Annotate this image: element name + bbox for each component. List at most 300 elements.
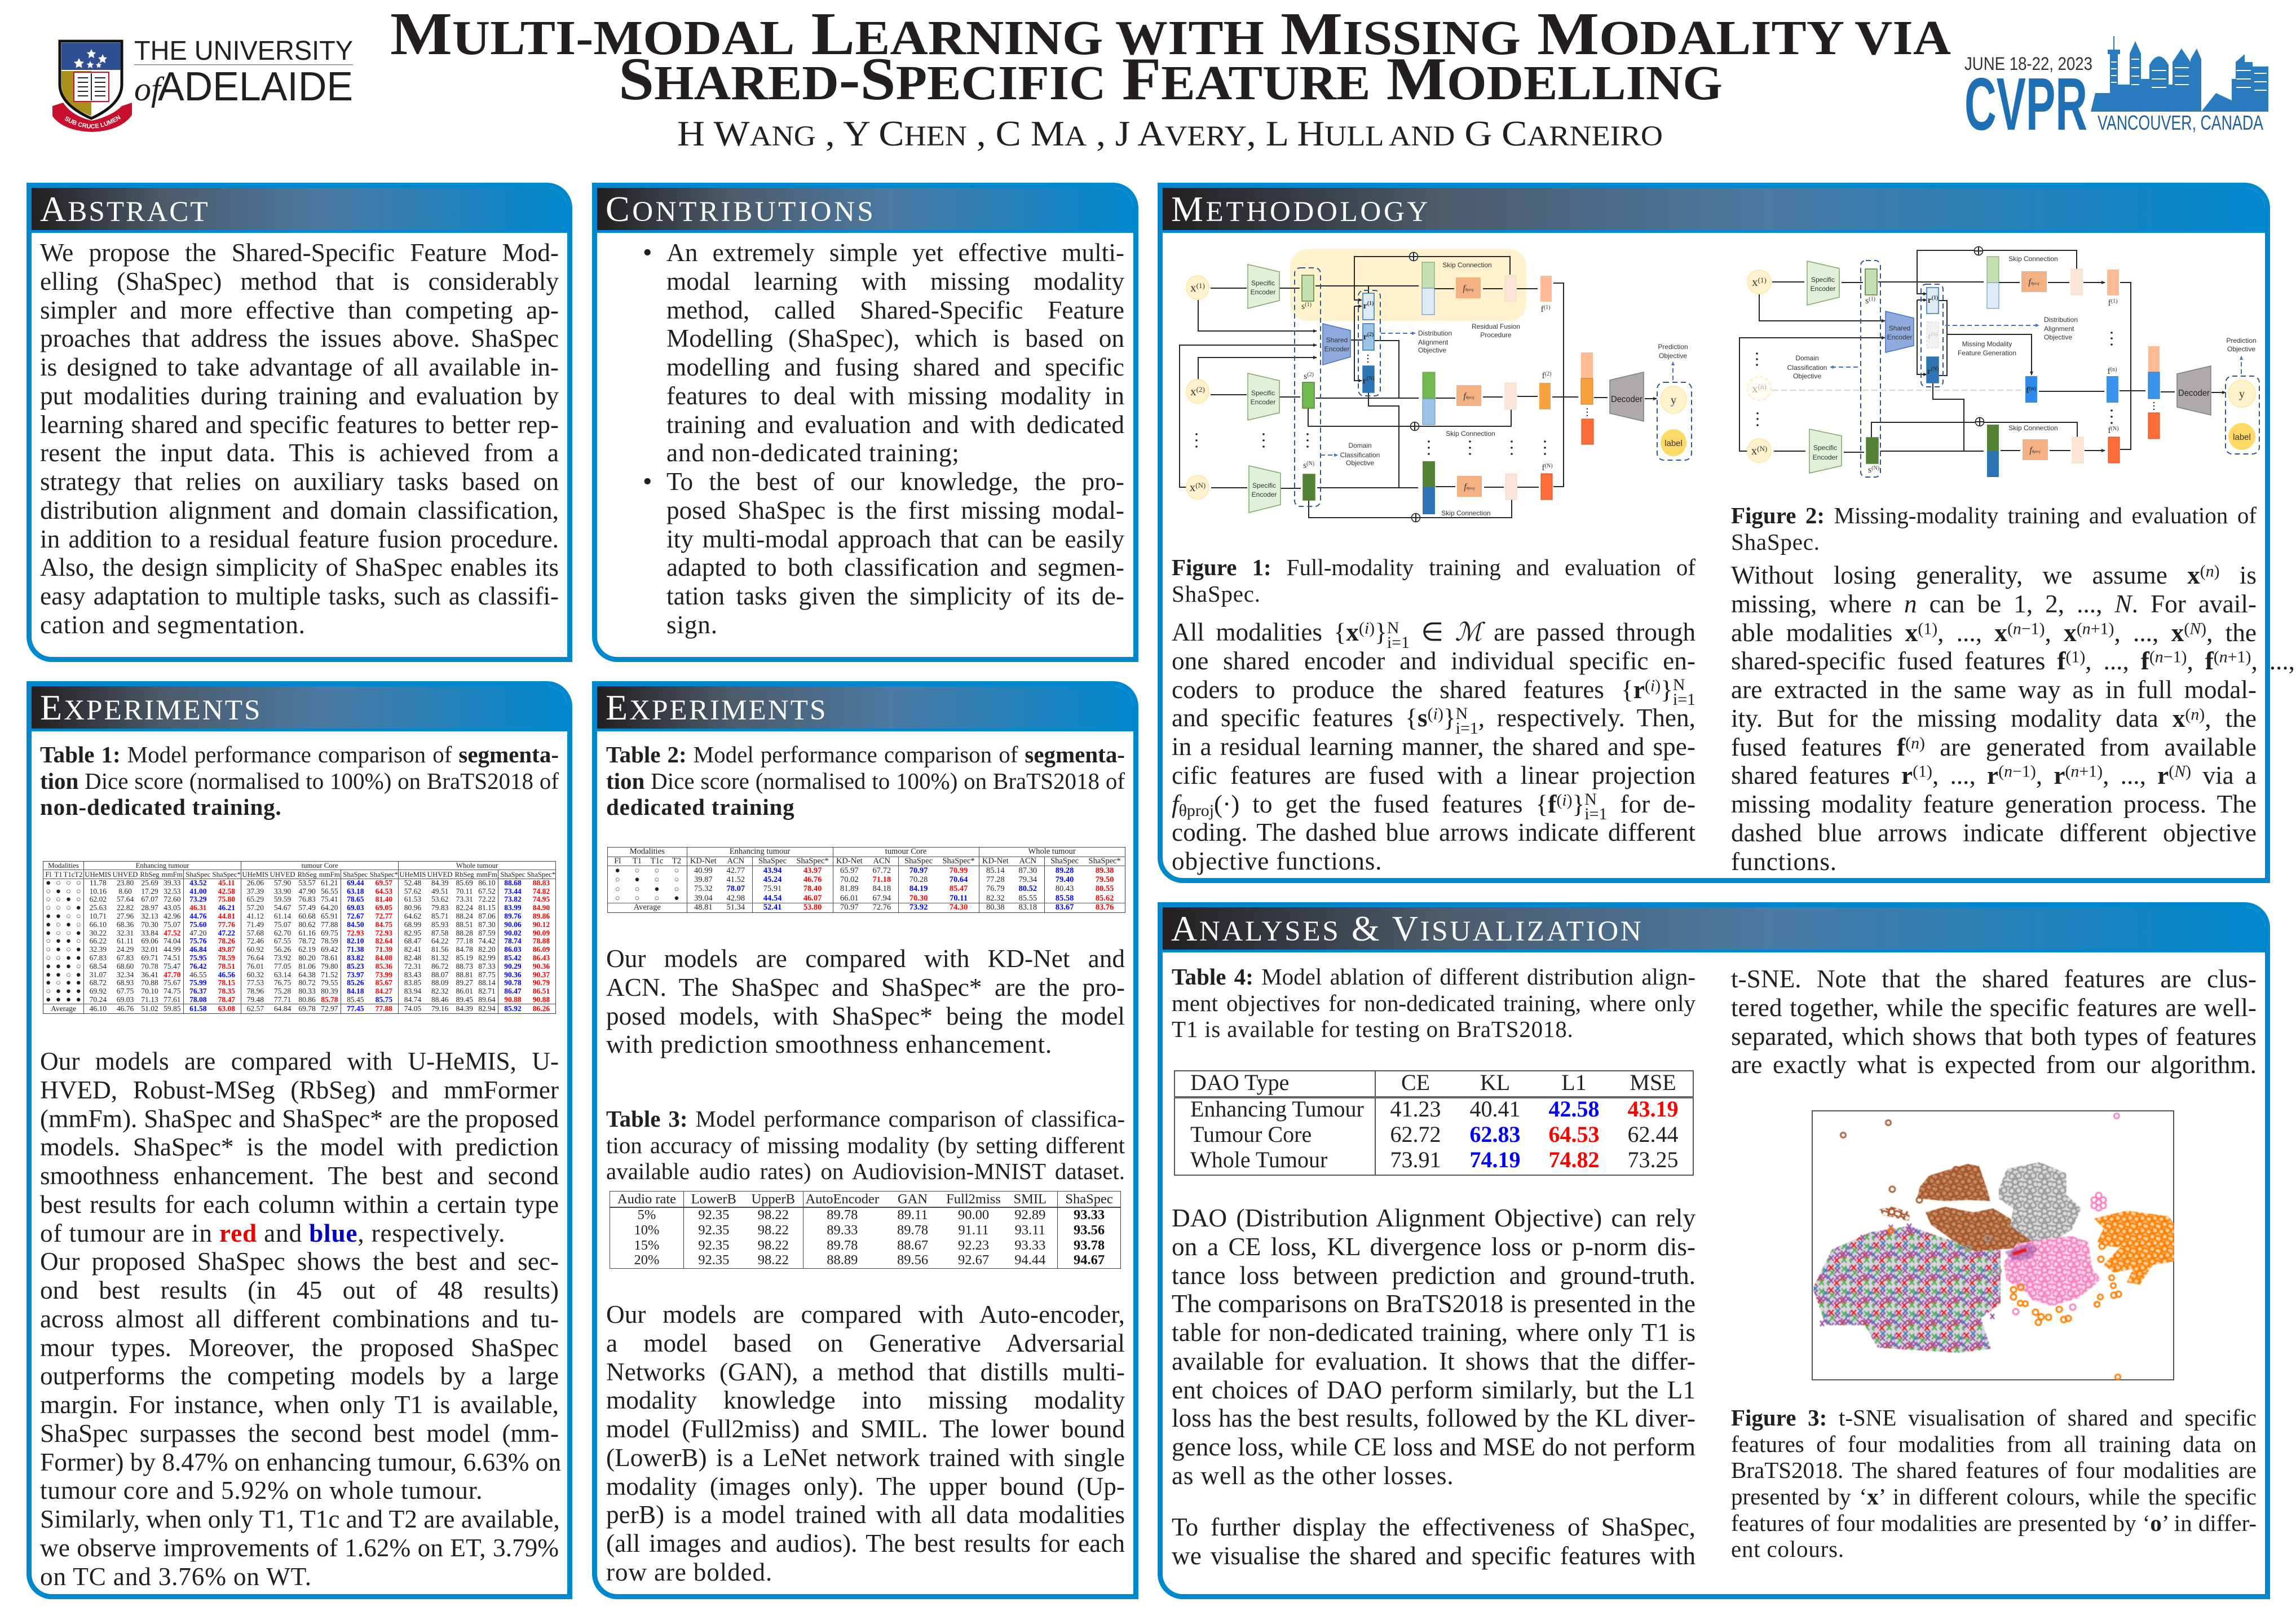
table 1: 88.07 [431,970,448,979]
table 2: T1 [633,857,642,866]
table 1: ○ [56,905,60,911]
table 2: 70.30 [909,893,928,902]
table 3: 93.78 [1074,1237,1105,1253]
figure 3 caption: features of four modalities from all training data on [1731,1431,2257,1457]
diagram labels: Skip Connection [1446,430,1495,438]
table 2: 80.43 [1056,884,1074,893]
heading: methodology [1163,188,2265,233]
table 1: 74.95 [533,895,550,903]
table 1: Average [51,1004,76,1013]
specific encoders: Specific [1811,276,1835,284]
input nodes: (2) [1196,385,1205,394]
table 1: 10.71 [90,912,107,920]
table 2: ○ [616,895,620,901]
table 2: 43.97 [803,866,822,875]
specific encoders: Encoder [1251,288,1275,296]
table 1: ○ [77,922,81,928]
diagram labels: f [2108,298,2111,308]
table 2: ● [674,895,679,901]
table 3: LowerB [691,1191,736,1207]
table 1: 75.07 [274,920,291,929]
table 2: 40.99 [694,866,713,875]
table 1: 47.70 [164,970,180,979]
table 1: 26.06 [247,879,264,887]
table 1: ● [46,997,50,1003]
input nodes: x [1190,385,1196,398]
table 1: ● [67,922,70,928]
figure 2 caption: ShaSpec. [1731,529,1820,555]
figure 2 explanation text: are extracted in the same way as in full modal- [1731,676,2257,704]
abstract text: learning shared and specific features to better rep- [40,411,559,439]
table 1: 74.04 [164,937,180,945]
table 1: 90.79 [533,978,550,987]
table 3: 93.33 [1014,1237,1045,1253]
experiments text left: ShaSpec surpasses the second best model (mm- [40,1419,559,1448]
input nodes: (N) [1195,481,1206,489]
table 1: 85.36 [376,962,392,970]
table 2: 44.54 [763,893,781,902]
table 1 caption: non-dedicated training. [40,794,281,820]
diagram labels [1787,255,2257,475]
table 1: ShaSpec [500,871,525,879]
table 1: 90.09 [533,929,550,937]
projection blocks [2021,271,2048,460]
table 1: 72.31 [404,962,421,970]
residual bars [2071,269,2083,463]
table 1: ● [67,938,70,944]
table 1: 75.47 [164,962,180,970]
table 3: 88.67 [897,1237,928,1253]
table 1: 80.86 [298,995,316,1004]
table 1: ShaSpec* [213,871,241,879]
fused features: (n) [2029,386,2036,392]
table 2: 82.32 [986,893,1005,902]
table 1: 69.03 [347,903,364,912]
table 3: SMIL [1013,1191,1047,1207]
table 2: ACN [727,857,744,866]
cluster: specific features brown [1840,1120,2033,1251]
diagram labels: (N) [2111,426,2119,432]
table 2: ● [616,868,620,873]
table 1: 73.97 [347,970,364,979]
table 3 caption: tion accuracy of missing modality (by setting different [606,1132,1125,1158]
table 1: 73.92 [274,954,291,962]
table 3: 98.22 [758,1223,789,1237]
diagram labels: (N) [1545,463,1553,469]
specific encoders: Encoder [1811,285,1835,293]
analysis text: tance loss between prediction and ground-truth. [1172,1261,1695,1289]
table 1: ● [56,997,60,1003]
bullet 2 text: tation tasks given the simplicity of its de- [666,582,1124,610]
table 1: 36.41 [141,970,158,979]
table 1: ○ [46,955,50,961]
table 2: ○ [674,877,679,882]
table 1: 90.88 [504,995,522,1004]
diagram labels: f [1542,371,1545,381]
table 2: ● [655,886,659,892]
table 1: 66.10 [90,920,107,929]
table 1: 61.21 [321,879,338,887]
diagram labels: Skip Connection [1441,509,1491,517]
table 1: 82.71 [478,987,496,995]
table 1: Fl [45,871,51,879]
bullet 2 text: ity multi-modal approach that can be easily [666,524,1124,553]
figure 2 caption [1731,502,2257,555]
diagram labels: Feature Generation [1958,349,2016,357]
figure 1 explanation text: N [1387,619,1399,637]
table 2: 46.76 [803,875,822,884]
figure 2 caption: Figure 2: Missing-modality training and evaluation of [1731,502,2257,528]
experiments text middle upper: ACN. The ShaSpec and ShaSpec* are the pro- [606,973,1125,1001]
table 1: ● [46,964,50,969]
table 1: UHVED [113,871,138,879]
table 1: 61.58 [189,1004,206,1013]
table 1: 33.84 [141,929,158,937]
table 4: DAO Type [1190,1070,1289,1095]
diagram labels: Skip Connection [2008,424,2058,432]
abstract text: proaches that address the issues above. ShaSpec [40,324,559,352]
analysis text: on a CE loss, KL divergence loss or p-norm dis- [1172,1233,1695,1261]
diagram labels: (2) [1307,372,1314,378]
table 1: ShaSpec* [527,871,555,879]
experiments text middle lower: model (Full2miss) and SMIL. The lower bound [606,1415,1125,1443]
figure 1 explanation text: N [1456,704,1468,723]
table 2: ○ [635,895,639,901]
skip connection adders [1410,253,1420,522]
table 1: 61.53 [404,895,421,903]
table 2: 70.28 [909,875,928,884]
table 1: T2 [74,871,82,879]
diagram labels: Classification [1340,451,1380,459]
table 1: 71.38 [347,945,364,954]
table 1: 47.22 [218,929,235,937]
table 3: 89.78 [897,1223,928,1237]
table 1: 44.81 [218,912,235,920]
table 1: 72.22 [478,895,496,903]
figure 1 explanation text: in a residual learning manner, the shared and spe- [1172,732,1695,761]
table 1: 59.85 [164,1004,180,1013]
table 1: 67.75 [117,987,134,995]
abstract text: distribution alignment and domain classification, [40,496,559,524]
table 1: 69.57 [376,879,392,887]
table 1: 73.31 [456,895,473,903]
table 1: 84.78 [456,945,473,954]
diagram labels: (1) [1305,302,1312,308]
table 2: 51.34 [726,903,745,912]
table 1: 78.59 [218,954,235,962]
figure 1 explanation text: i=1 [1673,690,1695,709]
shared features [1362,293,1375,392]
table 1: 73.44 [504,887,522,895]
bullet 1 text [666,239,1124,467]
table 1: 74.05 [404,1004,421,1013]
table 1: 78.59 [321,937,338,945]
table 1: 77.18 [456,937,473,945]
table 1: 59.59 [274,895,291,903]
table 1: ● [67,997,70,1003]
experiments text left: mour types. Moreover, the proposed ShaSpec [40,1333,559,1361]
table 1: 27.96 [117,912,134,920]
table 1: 89.76 [504,912,522,920]
specific features [1865,269,1878,464]
table 2: 85.14 [986,866,1005,875]
table 2 caption: Table 2: Model performance comparison of segmenta- [606,742,1125,767]
experiments text middle upper: with prediction smoothness enhancement. [606,1030,1052,1058]
table 4: Enhancing Tumour [1190,1096,1364,1122]
table 1: UHVED [427,871,453,879]
table 1: 80.72 [298,978,316,987]
table 1: ● [67,955,70,961]
figure 1 explanation text: i=1 [1387,633,1410,652]
heading: abstract: ABSTRACT [40,189,210,229]
abstract text: elling (ShaSpec) method that is considerably [40,267,559,295]
table 2 [607,847,1125,912]
table 1: ● [77,972,81,978]
connector lines [1180,257,1657,518]
table 1: 87.06 [478,912,496,920]
t-SNE explanation text: are exactly what is expected from our algorithm. [1731,1051,2257,1079]
table 1: 78.65 [347,895,364,903]
table 1: 88.81 [456,970,473,979]
table 1: 47.20 [189,929,206,937]
table 1: 79.80 [321,962,338,970]
table 1: 57.64 [117,895,134,903]
table 1: 57.90 [274,879,291,887]
decoder: Decoder [2178,389,2210,398]
table 1: 64.53 [376,887,392,895]
table 2: 65.97 [840,866,859,875]
table 3: Audio rate [617,1191,676,1207]
table 1: ● [56,947,60,952]
figure 2 explanation text: missing, where n can be 1, 2, ..., N. For avail- [1731,590,2257,618]
experiments text middle lower: modality (images only). The upper bound (Up- [606,1472,1125,1500]
experiments text left: Our models are compared with U-HeMIS, U- [40,1047,559,1075]
heading: methodology: METHODOLOGY [1171,189,1430,229]
table 1: 85.42 [504,954,522,962]
table 1: 68.72 [90,978,107,987]
table 1: ● [46,980,50,986]
shared features: (2) [1367,332,1374,338]
table 1 caption: Table 1: Model performance comparison of segmenta- [40,742,559,767]
table 2: 79.34 [1019,875,1037,884]
table 1: UHeMIS [85,871,111,879]
shared features: (N) [1931,366,1939,372]
diagram labels: Alignment [1418,338,1449,346]
experiments text left: of tumour are in red and blue, respectively. [40,1219,505,1247]
table 2: Enhancing tumour [730,847,790,856]
table 1: 79.55 [321,978,338,987]
table 1: 60.68 [298,912,316,920]
table 3: 89.56 [897,1252,928,1268]
table 1: 78.08 [189,995,206,1004]
logo wordmark: ADELAIDE [158,64,353,109]
table 1: 77.88 [376,1004,392,1013]
table 1: 72.77 [376,912,392,920]
table 1: 86.26 [533,1004,550,1013]
table 1: 75.76 [189,937,206,945]
table 1: ● [46,922,50,928]
table 2: ACN [1019,857,1036,866]
input nodes [1747,270,1771,462]
table 1: 81.56 [431,945,448,954]
bullet 2 text: posed ShaSpec is the first missing modal- [666,496,1124,524]
table 1: 70.30 [141,920,158,929]
table 1: 72.46 [247,937,264,945]
table 1: 82.10 [347,937,364,945]
prediction outputs [2228,380,2255,450]
table 1: 22.82 [117,903,134,912]
table 1: 43.05 [164,903,180,912]
table 3 [610,1191,1121,1269]
figure 2 explanation text: dashed blue arrows indicate different objective [1731,819,2257,847]
table 1: 71.13 [141,995,158,1004]
table 1: 32.31 [117,929,134,937]
bullet 1 text: Modelling (ShaSpec), which is based on [666,324,1124,352]
table 1 caption: tion Dice score (normalised to 100%) on BraTS2018 of [40,768,559,794]
table 1: 57.62 [404,887,421,895]
table 1: 32.34 [117,970,134,979]
abstract text: easy adaptation to multiple tasks, such as classifi- [40,582,559,610]
table 2: tumour Core [885,847,926,856]
table 1: ○ [67,905,70,911]
table 1: ○ [46,905,50,911]
bullet 1 text: and non-dedicated training; [666,439,960,467]
abstract text: cation and segmentation. [40,611,306,639]
input nodes: x [1751,444,1757,457]
table 1: 85.78 [321,995,338,1004]
visualisation intro text: we visualise the shared and specific features with [1172,1542,1695,1570]
table 1: 84.08 [376,954,392,962]
table 1: 57.20 [247,903,264,912]
panel: analyses and visualization [1158,902,2270,1599]
table 1: ● [67,964,70,969]
table 1: T1 [54,871,63,879]
heading: analyses and visualization [1163,907,2265,952]
table 2: 85.62 [1096,893,1114,902]
bullet 1 text: modelling and fusing shared and specific [666,353,1124,381]
table 1: 81.15 [478,903,496,912]
panel: experiments middle [592,681,1138,1599]
table 2: 45.24 [763,875,781,884]
table 2: Modalities [630,847,665,856]
table 1: ● [67,988,70,994]
table 1: 32.01 [141,945,158,954]
experiments text left: smoothness enhancement. The best and second [40,1162,559,1190]
table 1: 85.69 [456,879,473,887]
table 1: 17.29 [141,887,158,895]
table 1: 68.54 [90,962,107,970]
table 2 caption: dedicated training [606,794,794,820]
table 1: 89.45 [456,995,473,1004]
figure 1 explanation text: objective functions. [1172,847,1382,875]
table 1: 72.93 [376,929,392,937]
table 1: 78.51 [218,962,235,970]
table 1: 42.58 [218,887,235,895]
shared features: (1) [1932,295,1938,301]
table 1: 68.93 [117,978,134,987]
table 1: 83.82 [347,954,364,962]
decoder [2177,366,2211,415]
table 1: 10.16 [90,887,107,895]
diagram labels: f [1542,463,1545,473]
table 1: 68.36 [117,920,134,929]
table 1: 77.88 [321,920,338,929]
cluster overlap [2004,1243,2038,1261]
experiments text left: (mmFm). ShaSpec and ShaSpec* are the proposed [40,1104,559,1132]
figure 1 caption: Figure 1: Full-modality training and evaluation of [1172,554,1695,580]
table 1: 69.92 [90,987,107,995]
table 1: 70.24 [90,995,107,1004]
table 2: KD-Net [982,857,1009,866]
table 1: 75.60 [189,920,206,929]
table 2: 52.41 [763,903,781,912]
table 1: ● [56,914,60,919]
table 1: 78.72 [298,937,316,945]
prediction outputs: y [1671,394,1676,407]
table 1: 82.64 [376,937,392,945]
table 1: ○ [46,889,50,894]
t-SNE explanation text: t-SNE. Note that the shared features are clus- [1731,965,2257,993]
table 1: 56.55 [321,887,338,895]
table 1: 25.63 [90,903,107,912]
table 1: ● [46,914,50,919]
figure 2 explanation text: functions. [1731,847,1837,875]
table 1: 85.71 [431,912,448,920]
chart: t-SNE scatter plot [1812,1110,2174,1380]
table 1: 70.78 [141,962,158,970]
table 3: 89.78 [827,1207,858,1223]
table 2: 74.30 [950,903,968,912]
specific encoders [1248,264,1281,513]
table 3: GAN [898,1191,928,1207]
table 1: 85.19 [456,954,473,962]
table 2: 81.89 [840,884,859,893]
decoder [1610,372,1644,421]
experiments text left: we observe improvements of 1.62% on ET, 3.79% [40,1534,559,1562]
figure 1 caption: ShaSpec. [1172,581,1261,607]
table 1: 44.76 [189,912,206,920]
table 2: ○ [655,895,659,901]
shared features: r [1363,301,1367,311]
table 1: ○ [67,880,70,886]
bullet 1 text: An extremely simple yet effective multi- [666,239,1124,267]
table 1: T1c [63,871,74,879]
table 1: 67.83 [90,954,107,962]
table 1: 65.29 [247,895,264,903]
table 1: ShaSpec [186,871,210,879]
table 1: 30.22 [90,929,107,937]
figure 1 explanation text: fθproj(·) to get the fused features {f(i)} for de- [1172,789,1695,819]
specific encoders: Encoder [1813,453,1838,461]
input nodes: x [1190,480,1195,494]
table 1: 68.60 [117,962,134,970]
table 1: 90.78 [504,978,522,987]
table 2: 70.99 [950,866,968,875]
table 3: 93.56 [1074,1223,1105,1237]
table 1: 75.95 [189,954,206,962]
experiments text middle lower: (all images and audios). The best results for each [606,1529,1125,1557]
table 1: 78.35 [218,987,235,995]
table 1: 86.51 [533,987,550,995]
heading: experiments [32,686,567,731]
analysis text: gence loss, while CE loss and MSE do not perform [1172,1433,1695,1461]
logo: University of Adelaide [52,36,353,132]
table 2: 70.02 [840,875,859,884]
table 2 caption [606,742,1125,820]
table 1: 84.50 [347,920,364,929]
table 1: 90.88 [533,995,550,1004]
diagram labels: f [1540,304,1544,314]
